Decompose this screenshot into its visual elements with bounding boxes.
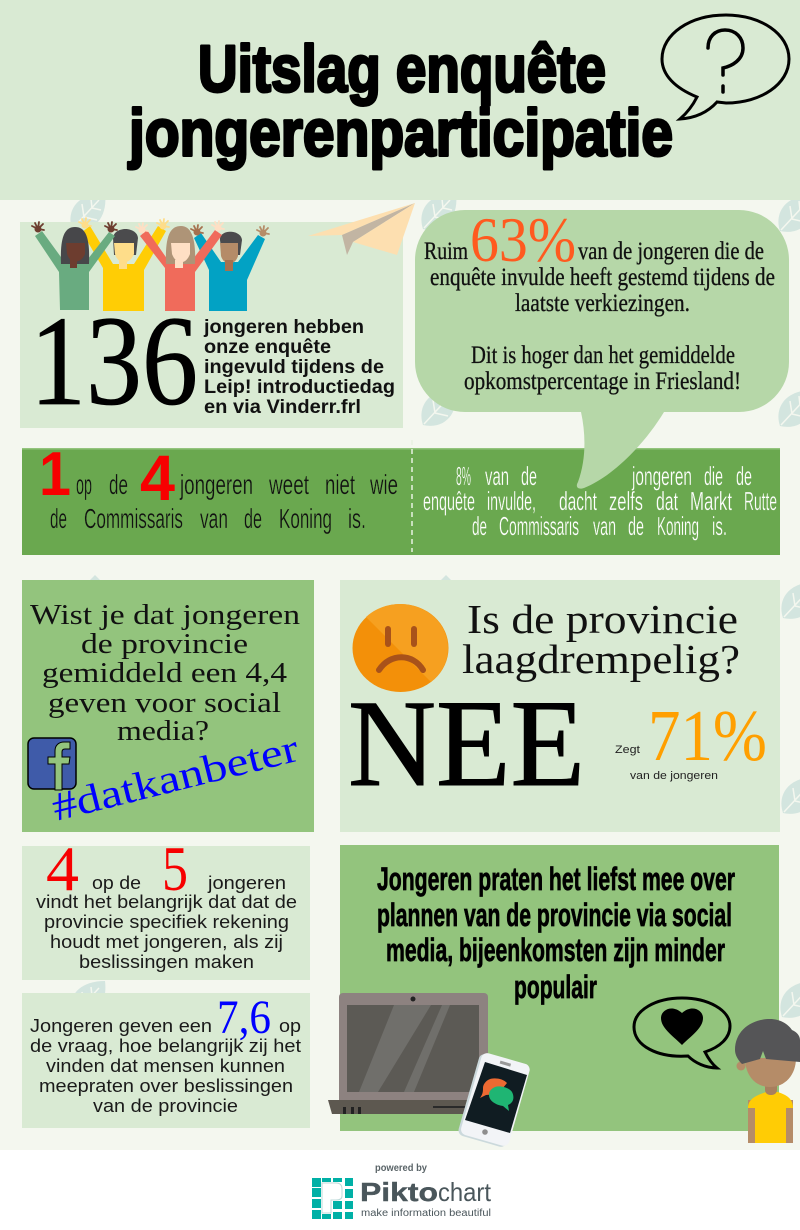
panel: 4 op de 5 xyxy=(22,833,310,980)
text: 8% Mark Rutte: van xyxy=(593,511,616,541)
title: jongerenparticipatie xyxy=(127,96,673,170)
text: 8% Mark Rutte: Markt xyxy=(690,486,733,516)
text: 63% statement: Ruim xyxy=(424,238,468,265)
text: 8% Mark Rutte: 8% xyxy=(456,461,471,491)
text: 8% Mark Rutte: de xyxy=(628,511,644,541)
panel: social media score xyxy=(22,580,314,832)
text: wist je dat: geven voor social xyxy=(48,687,281,719)
panel: 7,6: vinden dat mensen kunnen xyxy=(46,1056,285,1076)
panel: 4 op de 5: provincie specifiek rekening xyxy=(44,912,289,932)
text: 8% Mark Rutte: enquête xyxy=(423,486,475,516)
text: 1 op de 4: Koning xyxy=(279,503,332,534)
text: 8% Mark Rutte: Koning xyxy=(657,511,699,541)
text: jongeren hebben: Leip! introductiedag xyxy=(204,377,395,398)
panel: 7,6: van de provincie xyxy=(93,1096,238,1116)
icon: paper plane xyxy=(308,203,415,255)
panel: 136 jongeren xyxy=(20,218,403,432)
text: jongeren hebben: en via Vinderr.frl xyxy=(204,397,361,418)
text: 1 op de 4: de xyxy=(50,503,67,534)
icon: group of cheering people xyxy=(32,218,269,311)
text: 8% Mark Rutte: is. xyxy=(712,511,727,541)
text: 1 op de 4: is. xyxy=(348,503,366,534)
text: 1 op de 4: jongeren xyxy=(179,469,253,500)
text: 63% statement: laatste verkiezingen. xyxy=(515,290,690,317)
text: wist je dat: gemiddeld een 4,4 xyxy=(42,657,288,689)
panel: 4 op de 5: op de xyxy=(92,873,141,893)
panel: commissaris band xyxy=(22,440,780,555)
text: 8% Mark Rutte: jongeren xyxy=(631,461,692,491)
text: 8% Mark Rutte: de xyxy=(521,461,537,491)
text: 8% Mark Rutte: zelfs xyxy=(609,486,643,516)
powered by label: powered by xyxy=(375,1163,427,1174)
header band xyxy=(0,0,800,200)
panel: 7,6: de vraag, hoe belangrijk zij het xyxy=(30,1036,301,1056)
text: 1 op de 4: van xyxy=(200,503,228,534)
piktochart wordmark: Pikto xyxy=(360,1177,438,1207)
icon: facebook xyxy=(28,738,76,790)
text: 8% Mark Rutte xyxy=(423,461,777,541)
text: jongeren hebben xyxy=(203,317,395,418)
piktochart wordmark xyxy=(360,1177,492,1219)
text: 8% Mark Rutte: dacht xyxy=(559,486,597,516)
text: 1 op de 4: 4 xyxy=(140,442,175,514)
text: 63% statement xyxy=(424,205,775,395)
panel: 7,6: op xyxy=(279,1016,301,1036)
panel: social media xyxy=(328,845,800,1148)
stat: zegt 71%: 71% xyxy=(648,695,767,776)
text: 1 op de 4: op xyxy=(76,469,92,500)
text: 1 op de 4: weet xyxy=(268,469,309,500)
panel: 4 op de 5: beslissingen maken xyxy=(79,952,254,972)
panel: laagdrempelig xyxy=(340,580,780,832)
text: wist je dat xyxy=(30,599,301,747)
text: 63% statement: 63% xyxy=(470,205,576,275)
text: 1 op de 4: 1 xyxy=(39,440,71,509)
icon: person xyxy=(735,1019,800,1143)
title xyxy=(127,32,673,170)
panel: 7,6: meepraten over beslissingen xyxy=(39,1076,293,1096)
text: jongeren praten xyxy=(377,861,735,1005)
text: 1 op de 4: de xyxy=(109,469,128,500)
piktochart wordmark: chart xyxy=(438,1177,492,1207)
panel: 7,6: 7,6 xyxy=(217,991,271,1044)
icon: sad face xyxy=(352,604,448,692)
speech bubble: 63% xyxy=(415,205,789,489)
panel: 7,6: Jongeren geven een xyxy=(30,1016,212,1036)
question: Is de provincie xyxy=(467,596,738,642)
panel: 7,6 xyxy=(22,991,310,1128)
panel: 4 op de 5: 4 xyxy=(46,833,79,904)
icon: speech bubble with question mark xyxy=(662,15,789,119)
text: 1 op de 4: Commissaris xyxy=(84,503,183,534)
panel: 4 op de 5: houdt met jongeren, als zij xyxy=(50,932,283,952)
text: 63% statement: Dit is hoger dan het gemiddelde xyxy=(471,342,735,369)
text: 1 op de 4 xyxy=(39,440,398,534)
text: wist je dat: Wist je dat jongeren xyxy=(30,599,301,631)
text: 8% Mark Rutte: de xyxy=(736,461,752,491)
icon: laptop xyxy=(328,993,488,1114)
hashtag: #datkanbeter xyxy=(47,725,303,830)
panel: 4 op de 5: vindt het belangrijk dat dat de xyxy=(36,892,297,912)
panel: 4 op de 5: jongeren xyxy=(207,873,286,893)
big word NEE: NEE xyxy=(348,675,585,812)
text: jongeren hebben: onze enquête xyxy=(204,337,331,358)
title: Uitslag enquête xyxy=(198,32,606,106)
text: 8% Mark Rutte: dat xyxy=(656,486,678,516)
text: 1 op de 4: niet xyxy=(325,469,355,500)
panel: 4 op de 5: 5 xyxy=(162,833,188,904)
icon: phone with chat bubbles xyxy=(457,1052,531,1148)
text: 63% statement: opkomstpercentage in Friesland! xyxy=(464,368,741,395)
text: 8% Mark Rutte: invulde, xyxy=(487,486,536,516)
text: jongeren praten: populair xyxy=(514,969,597,1005)
piktochart wordmark: make information beautiful xyxy=(361,1208,491,1219)
text: wist je dat: media? xyxy=(117,715,209,747)
text: jongeren hebben: jongeren hebben xyxy=(203,317,364,338)
stat: zegt 71%: van de jongeren xyxy=(630,770,718,782)
stat: zegt 71%: Zegt xyxy=(615,744,640,756)
text: jongeren hebben: ingevuld tijdens de xyxy=(204,357,384,378)
text: 1 op de 4: wie xyxy=(369,469,398,500)
text: 8% Mark Rutte: die xyxy=(704,461,723,491)
stat: zegt 71% xyxy=(615,695,767,782)
question xyxy=(462,596,740,682)
text: 1 op de 4: de xyxy=(244,503,262,534)
icon: heart speech bubble xyxy=(634,998,730,1068)
text: 8% Mark Rutte: de xyxy=(472,511,487,541)
piktochart logo mark xyxy=(312,1178,353,1219)
question: laagdrempelig? xyxy=(462,636,740,682)
text: wist je dat: de provincie xyxy=(81,628,248,660)
footer xyxy=(0,1150,800,1230)
big number 136: 136 xyxy=(30,290,198,432)
text: 63% statement: van de jongeren die de xyxy=(578,238,764,265)
text: 8% Mark Rutte: van xyxy=(485,461,509,491)
text: 8% Mark Rutte: Commissaris xyxy=(499,511,579,541)
